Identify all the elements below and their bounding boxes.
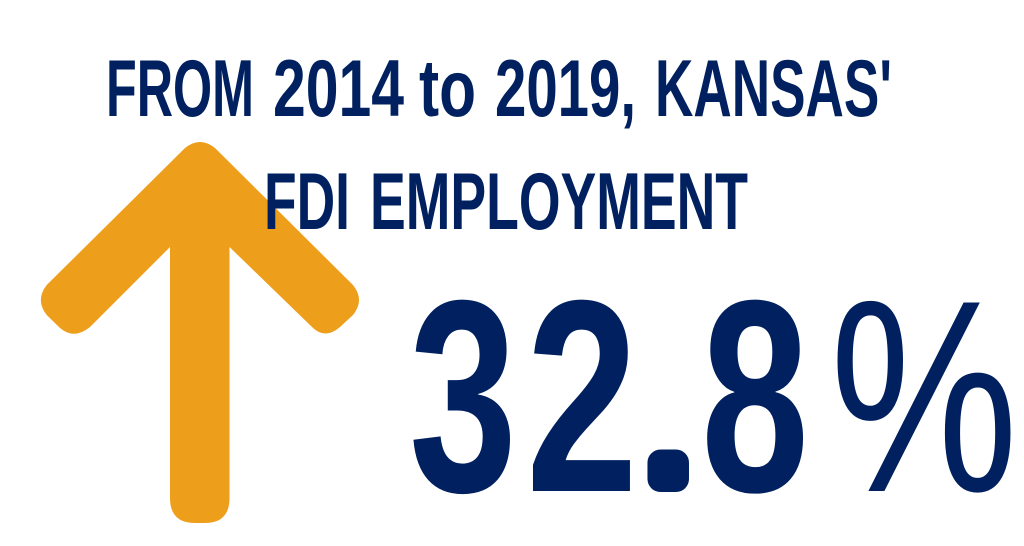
statistic: 32.8% xyxy=(409,244,1018,546)
heading line 1: to xyxy=(419,44,476,134)
heading line 2 xyxy=(264,157,748,247)
statistic: 32.8%: . xyxy=(653,380,684,503)
heading line 1: FROM xyxy=(106,44,254,134)
icon: upward arrow xyxy=(41,142,359,523)
heading line 1 xyxy=(106,44,892,134)
heading xyxy=(106,44,892,247)
statistic: 32.8%: 2 xyxy=(526,244,638,546)
heading line 1: KANSAS' xyxy=(655,44,892,134)
heading line 2: FDI xyxy=(264,157,350,247)
heading line 1: 2019, xyxy=(495,44,636,134)
heading line 2: EMPLOYMENT xyxy=(370,157,748,247)
heading line 1: 2014 xyxy=(273,44,404,134)
statistic: 32.8%: 3 xyxy=(409,244,517,546)
statistic: 32.8%: 8 xyxy=(701,244,809,546)
